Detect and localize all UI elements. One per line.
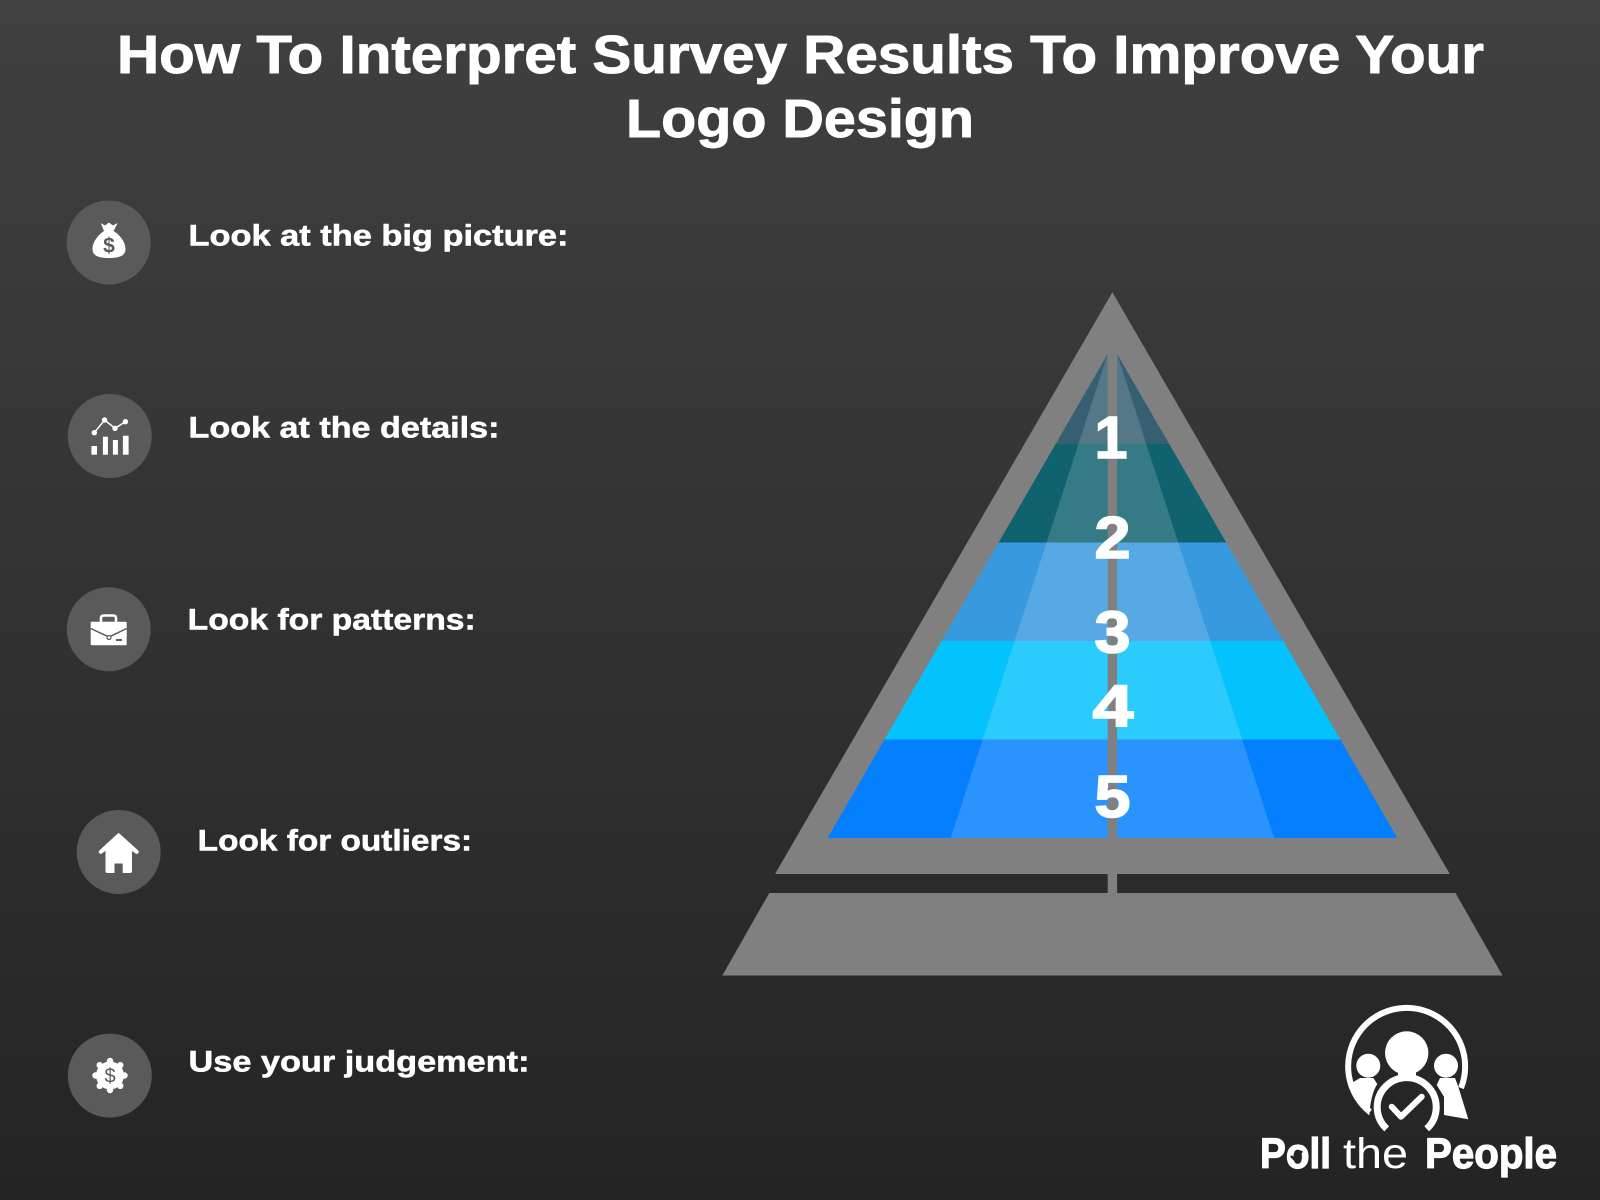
label: look at the details: Look at the details: bbox=[188, 411, 500, 444]
list item: look for patterns bbox=[67, 587, 476, 671]
logo wordmark: the bbox=[1343, 1130, 1408, 1178]
label: look for outliers: Look for outliers: bbox=[198, 824, 472, 857]
number 1: 1 bbox=[1095, 405, 1127, 471]
title: Logo Design bbox=[626, 89, 974, 149]
icon: money bag: $ bbox=[103, 234, 115, 258]
icon: money bag bbox=[92, 222, 126, 258]
highlight beam bbox=[951, 354, 1274, 838]
number 4: 4 bbox=[1092, 674, 1134, 740]
pyramid base bbox=[722, 893, 1502, 976]
label: look for patterns: Look for patterns: bbox=[188, 604, 476, 637]
pyramid outer frame bbox=[775, 292, 1450, 874]
label: use your judgement: Use your judgement: bbox=[188, 1045, 530, 1078]
layer 4 bbox=[884, 641, 1340, 740]
layer 5 bbox=[828, 740, 1397, 838]
label: look at the big picture: Look at the big picture: bbox=[188, 220, 568, 253]
icon: gear with dollar bbox=[92, 1058, 128, 1093]
layer 1 bbox=[1056, 354, 1169, 444]
logo mark bbox=[1348, 1008, 1468, 1129]
icon: chart bbox=[91, 417, 129, 455]
list item: look at the big picture bbox=[67, 200, 568, 284]
logo wordmark: Poll bbox=[1260, 1130, 1331, 1178]
number 3: 3 bbox=[1094, 600, 1130, 666]
icon: house bbox=[99, 834, 138, 872]
pyramid chart bbox=[722, 292, 1502, 976]
logo wordmark: People bbox=[1425, 1130, 1557, 1178]
logo: Poll the People bbox=[1260, 1008, 1557, 1178]
list item: look for outliers bbox=[77, 810, 472, 894]
layer 2 bbox=[999, 444, 1226, 542]
icon: briefcase bbox=[91, 616, 127, 645]
layer 3 bbox=[942, 542, 1283, 641]
title bbox=[117, 25, 1484, 149]
list item: look at the details bbox=[68, 394, 500, 478]
pyramid connector bbox=[1108, 873, 1117, 894]
number 5: 5 bbox=[1094, 764, 1130, 830]
number 2: 2 bbox=[1094, 505, 1130, 571]
list item: use your judgement bbox=[68, 1034, 530, 1118]
title: How To Interpret Survey Results To Improve Your bbox=[117, 25, 1484, 85]
icon: gear with dollar: $ bbox=[104, 1066, 116, 1088]
logo wordmark bbox=[1260, 1130, 1557, 1178]
